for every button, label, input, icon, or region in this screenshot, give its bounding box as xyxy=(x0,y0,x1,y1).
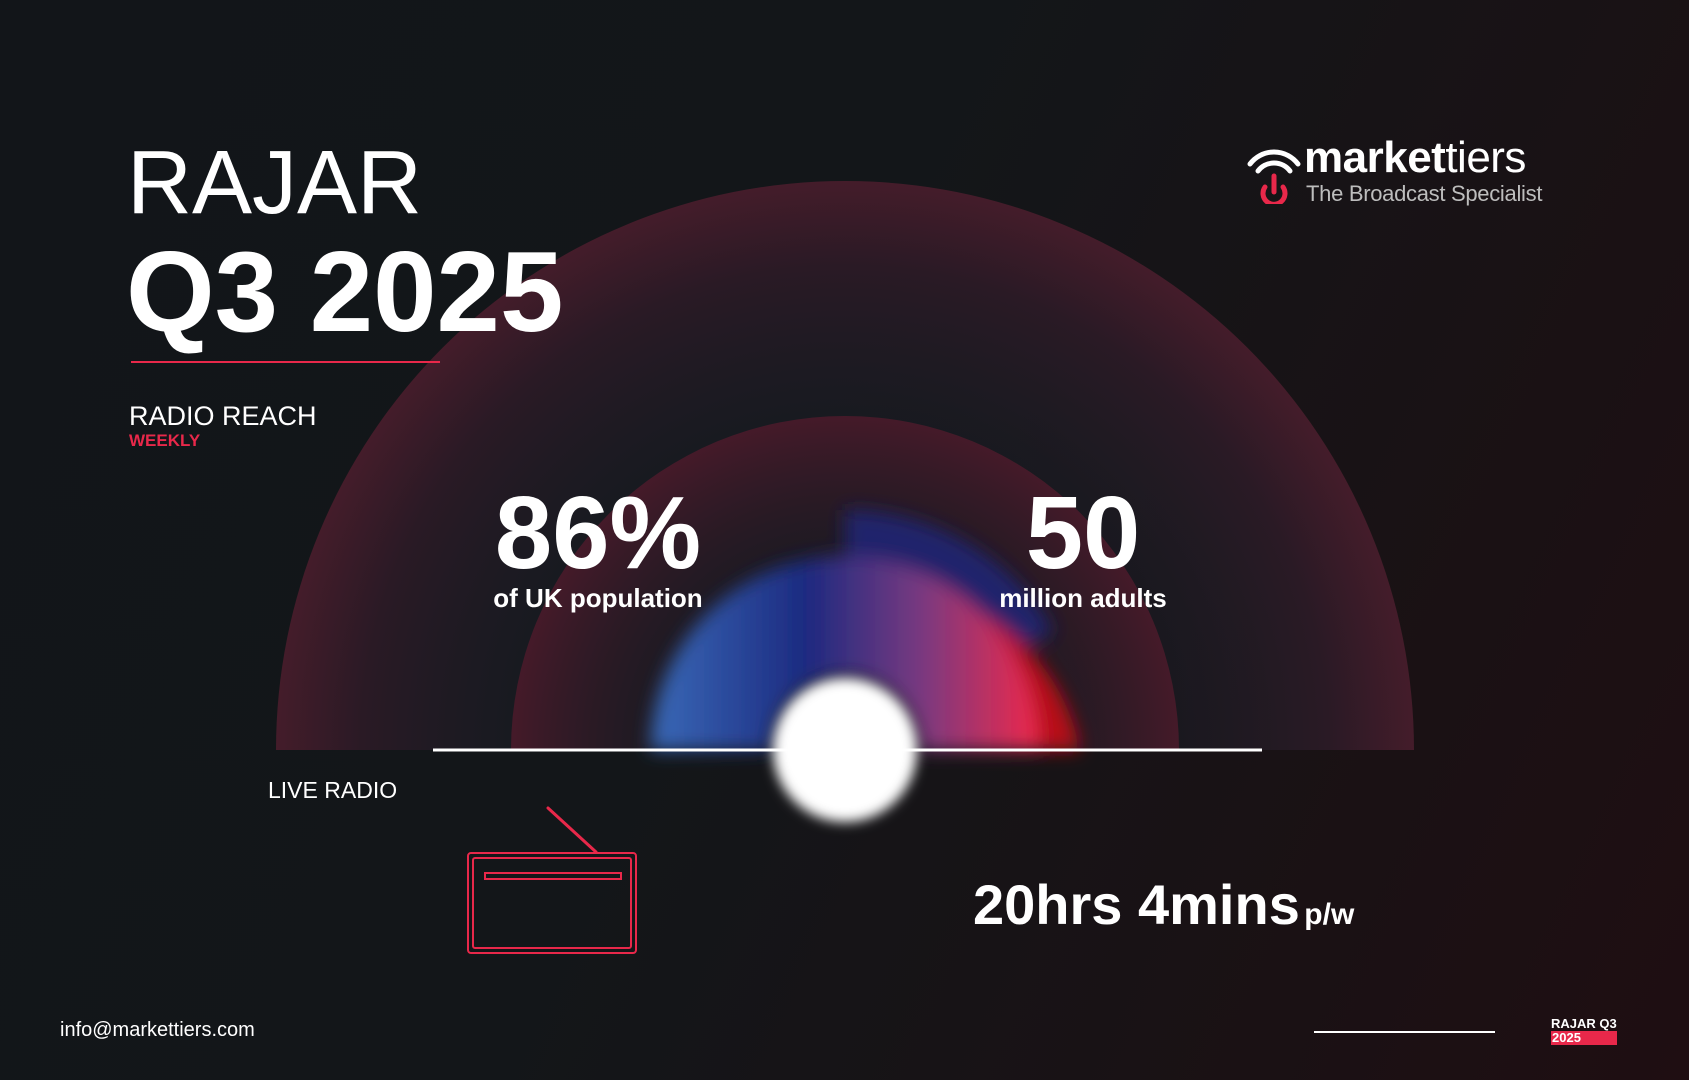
subtitle: radio reach weekly: WEEKLY xyxy=(129,431,200,450)
stat: 86%: 86% xyxy=(495,475,701,590)
logo: markettiers xyxy=(1248,133,1542,206)
footer badge: RAJAR Q3 xyxy=(1551,1016,1617,1031)
stat: 50 million: 50 xyxy=(1026,475,1140,590)
stat: listening hours: 20hrs 4mins p/w xyxy=(973,873,1354,936)
title: RAJAR: RAJAR xyxy=(127,133,422,233)
stat: 50 million xyxy=(999,475,1167,613)
subtitle: radio reach weekly: RADIO REACH xyxy=(129,401,317,431)
logo: markettiers: markettiers xyxy=(1304,133,1526,182)
icon: broadcast power xyxy=(1248,150,1300,204)
icon: radio xyxy=(467,806,637,954)
footer badge xyxy=(1551,1016,1617,1045)
footer badge: 2025 xyxy=(1552,1030,1581,1045)
label: live radio: LIVE RADIO xyxy=(268,777,397,803)
stat: 50 million: million adults xyxy=(999,583,1167,613)
logo: markettiers: The Broadcast Specialist xyxy=(1306,181,1542,206)
divider red underline xyxy=(131,361,440,363)
footer line xyxy=(1314,1031,1495,1033)
stat: 86%: of UK population xyxy=(493,583,703,613)
title: Q3 2025: Q3 2025 xyxy=(126,229,563,356)
subtitle: radio reach weekly xyxy=(129,401,317,450)
footer: email: info@markettiers.com xyxy=(60,1019,255,1041)
